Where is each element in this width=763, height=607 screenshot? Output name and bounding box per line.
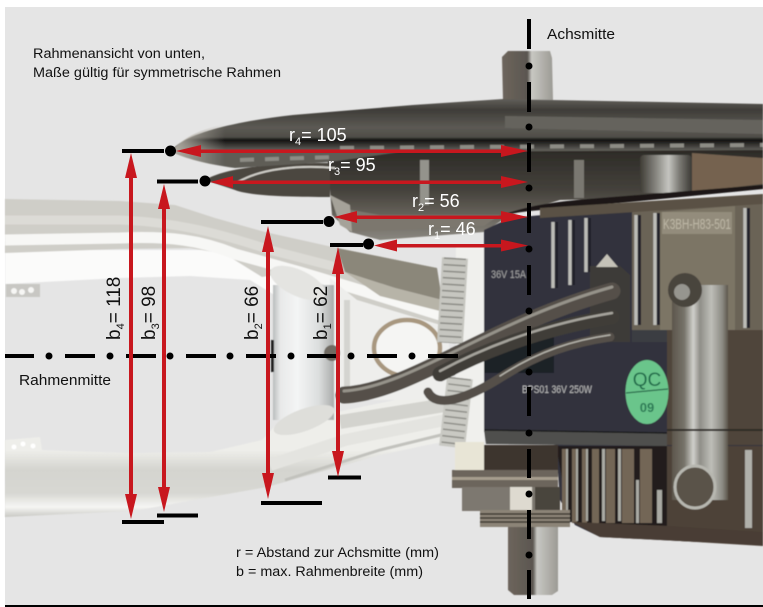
- frame centre line: [5, 352, 458, 360]
- width arrow b4: [125, 153, 137, 519]
- QC sticker: 09: [640, 400, 654, 415]
- photo: dropout plate and ring: [330, 278, 455, 400]
- label r1: 1: [434, 230, 440, 242]
- motor label: BPS01 36V 250W: BPS01 36V 250W: [522, 384, 592, 396]
- motor right column: [667, 330, 763, 445]
- legend: r = Abstand zur Achsmitte (mm): [236, 545, 439, 560]
- label r4: 4: [295, 136, 301, 148]
- view note: [33, 46, 281, 80]
- motor top embossed text: K3BH-H83-501: [663, 216, 731, 233]
- motor column screws: [675, 466, 715, 508]
- label r1: r: [428, 219, 434, 239]
- motor connector: [590, 266, 630, 342]
- axle bolt bottom: [508, 527, 558, 595]
- label b2: 2: [253, 323, 265, 329]
- legend: b = max. Rahmenbreite (mm): [236, 564, 423, 579]
- photo: vertical cross tube: [273, 285, 334, 420]
- motor label: 36V 15A: 36V 15A: [491, 269, 527, 281]
- photo: lower frame stay: [5, 398, 455, 517]
- heading: Rahmenmitte: Rahmenmitte: [19, 373, 111, 389]
- photo: chainring: [172, 99, 763, 197]
- width arrow b3: [158, 184, 170, 512]
- photo: upper frame stay: [5, 199, 447, 327]
- legend: [236, 545, 439, 579]
- label b3: b: [139, 329, 160, 340]
- motor lower housing and fins: [556, 446, 667, 528]
- label b2: b: [242, 329, 263, 340]
- label b1: 1: [322, 323, 334, 329]
- radial arrow r2: [334, 211, 528, 223]
- label r3: 3: [334, 166, 340, 178]
- photo: axle bolt top: [502, 51, 553, 100]
- photo: motor body: [484, 194, 763, 546]
- width arrow b1: [332, 247, 344, 477]
- QC sticker: QC: [633, 370, 661, 391]
- label b4: 4: [115, 323, 127, 329]
- black measurement ticks: [122, 149, 363, 524]
- photo: bottom bracket shell and welds: [450, 245, 484, 473]
- heading: Achsmitte: Achsmitte: [547, 27, 615, 43]
- photo: sprocket housing: [327, 148, 763, 240]
- label r2: = 56: [424, 191, 460, 211]
- QC sticker: [626, 360, 668, 424]
- label r3: = 95: [340, 155, 376, 175]
- label b4: b: [104, 329, 125, 340]
- label r2: 2: [418, 202, 424, 214]
- label b2: = 66: [242, 286, 263, 323]
- radial arrow r4: [176, 145, 528, 157]
- label r4: r: [289, 125, 295, 145]
- label b1: b: [311, 329, 332, 340]
- radial arrow r1: [374, 240, 528, 252]
- label b3: = 98: [139, 286, 160, 323]
- cables: [344, 287, 612, 400]
- view note: Maße gültig für symmetrische Rahmen: [33, 65, 281, 80]
- label r3: r: [328, 155, 334, 175]
- label b3: 3: [150, 323, 162, 329]
- motor fins: [553, 208, 747, 328]
- axle centre line: [526, 19, 532, 599]
- label r1: = 46: [440, 219, 476, 239]
- radial arrow r3: [210, 176, 528, 188]
- label r2: r: [412, 191, 418, 211]
- bottom rule: [5, 605, 763, 607]
- endpoint dots: [165, 146, 374, 250]
- view note: Rahmenansicht von unten,: [33, 46, 205, 61]
- label r4: = 105: [301, 125, 347, 145]
- label b4: = 118: [104, 277, 125, 323]
- width arrow b2: [262, 226, 274, 499]
- label b1: = 62: [311, 286, 332, 323]
- axle nuts and threads: [452, 445, 570, 527]
- photo: weld seams: [265, 259, 340, 441]
